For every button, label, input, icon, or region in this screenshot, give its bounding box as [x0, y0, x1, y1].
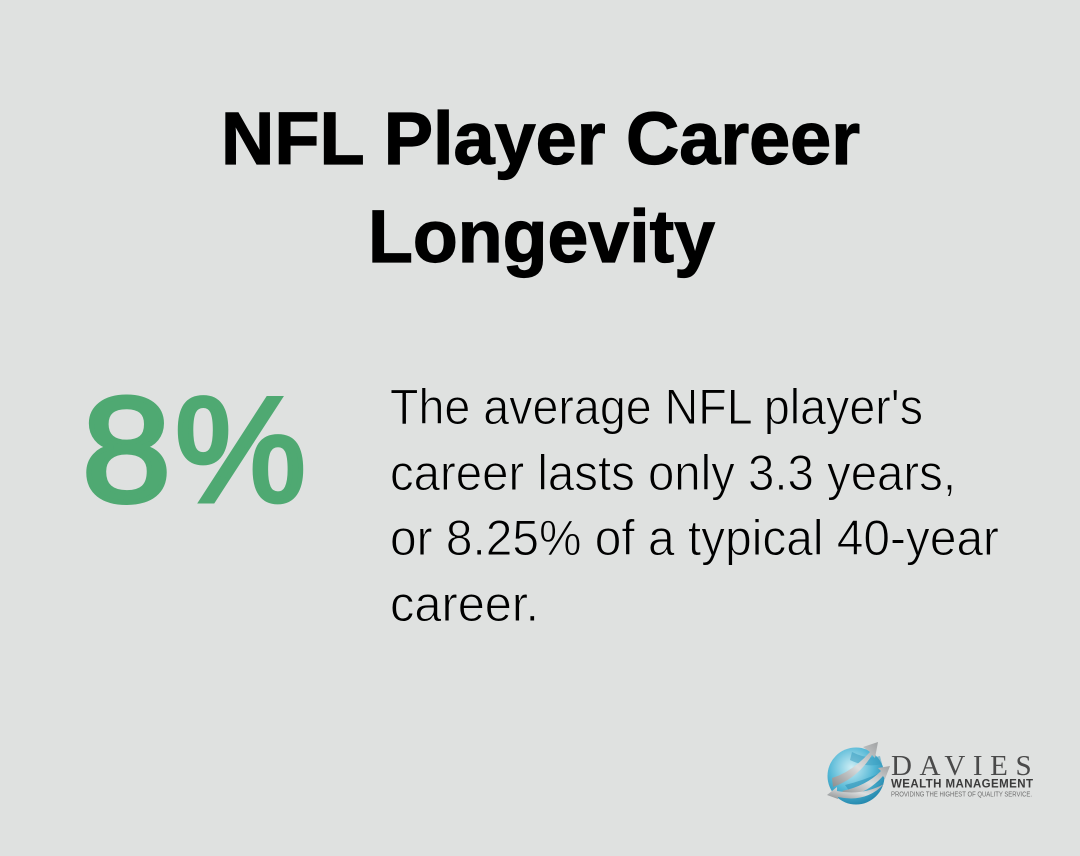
description text: The average NFL player's: [390, 378, 923, 435]
description text: career.: [390, 575, 539, 632]
logo: Davies Wealth Management: [827, 742, 1039, 804]
description text: career lasts only 3.3 years,: [390, 444, 956, 501]
statistic: 8%: %: [175, 366, 306, 533]
icon: globe with arrows: [827, 742, 890, 804]
description text: or 8.25% of a typical 40-year: [390, 509, 999, 566]
title: Longevity: [368, 195, 715, 278]
description text: [390, 378, 999, 632]
logo subtitle: WEALTH MANAGEMENT: [891, 778, 1033, 790]
title: [221, 97, 860, 278]
title: NFL Player Career: [221, 97, 860, 180]
logo wordmark: DAVIES: [891, 750, 1039, 782]
logo tagline: PROVIDING THE HIGHEST OF QUALITY SERVICE.: [891, 790, 1032, 798]
statistic: 8%: 8: [82, 366, 171, 533]
statistic: 8%: [82, 366, 306, 533]
